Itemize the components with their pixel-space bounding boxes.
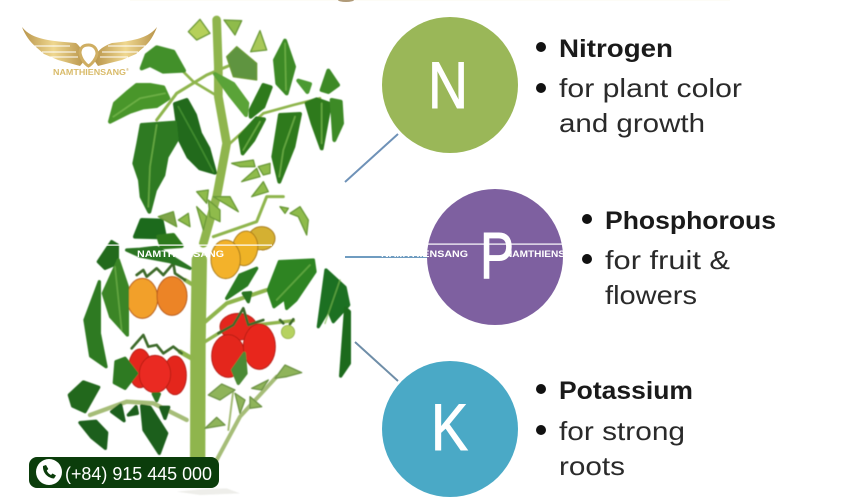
plant upper part: [110, 19, 342, 247]
circle P: P: [480, 218, 514, 292]
contact badge: [29, 457, 219, 488]
small green tomato: [281, 325, 295, 339]
brand name: NAMTHIENSANG: [53, 68, 126, 77]
nitrogen text: Nitrogen: [559, 35, 673, 63]
circle N: N: [428, 48, 468, 122]
yellow tomatoes: [211, 227, 275, 279]
nitrogen text: for plant color: [559, 73, 742, 103]
phosphorous text: [582, 207, 776, 310]
watermark band: [100, 244, 565, 259]
phone number: (+84) 915 445 000: [65, 464, 212, 484]
potassium text: [536, 377, 693, 481]
connector: potassium: [355, 342, 398, 381]
panel: nitrogen: [382, 17, 742, 153]
right wing: [94, 27, 157, 66]
logo: winged emblem: [22, 27, 157, 77]
watermark band: NAMTHIENSANG: [381, 249, 468, 259]
phosphorous text: flowers: [605, 280, 697, 310]
phosphorous text: Phosphorous: [605, 207, 776, 235]
connector: phosphorous: [345, 256, 427, 258]
circle P: [427, 189, 563, 325]
upper stems: [157, 20, 320, 243]
left wing: [22, 27, 85, 66]
calyx details: [132, 263, 293, 353]
circle K: [382, 361, 518, 497]
leaf highlights: [113, 43, 322, 207]
roots: [177, 488, 240, 495]
potassium text: for strong: [559, 416, 685, 446]
icon: phone: [36, 459, 62, 485]
shield: [80, 45, 97, 66]
dark leaves: [110, 41, 342, 247]
pale top leaves: [158, 19, 308, 235]
potassium text: roots: [559, 451, 625, 481]
leaf highlights: [115, 265, 340, 330]
leaves: [69, 242, 349, 453]
clipped title remnant: [130, 0, 730, 2]
red tomatoes: [129, 313, 275, 395]
illustration: tomato plant: [69, 19, 349, 495]
watermark band: NAMTHIENSANG: [137, 249, 224, 259]
panel: potassium: [382, 361, 693, 497]
lower stems: [90, 260, 293, 460]
watermark band: NAMTHIENSANG: [259, 249, 346, 259]
potassium text: Potassium: [559, 377, 693, 405]
nitrogen text: [536, 35, 742, 138]
circle K: K: [431, 390, 468, 464]
logo: winged emblem: ®: [126, 67, 129, 72]
orange tomatoes: [127, 277, 187, 318]
connector: nitrogen: [345, 134, 398, 182]
wing feather lines: [34, 46, 146, 57]
plant lower part: [69, 227, 349, 495]
phosphorous text: for fruit &: [605, 245, 730, 275]
panel: phosphorous: [427, 189, 776, 325]
nitrogen text: and growth: [559, 108, 705, 138]
watermark band: NAMTHIENS: [505, 249, 565, 259]
circle N: [382, 17, 518, 153]
pale lower leaves: [205, 365, 302, 428]
